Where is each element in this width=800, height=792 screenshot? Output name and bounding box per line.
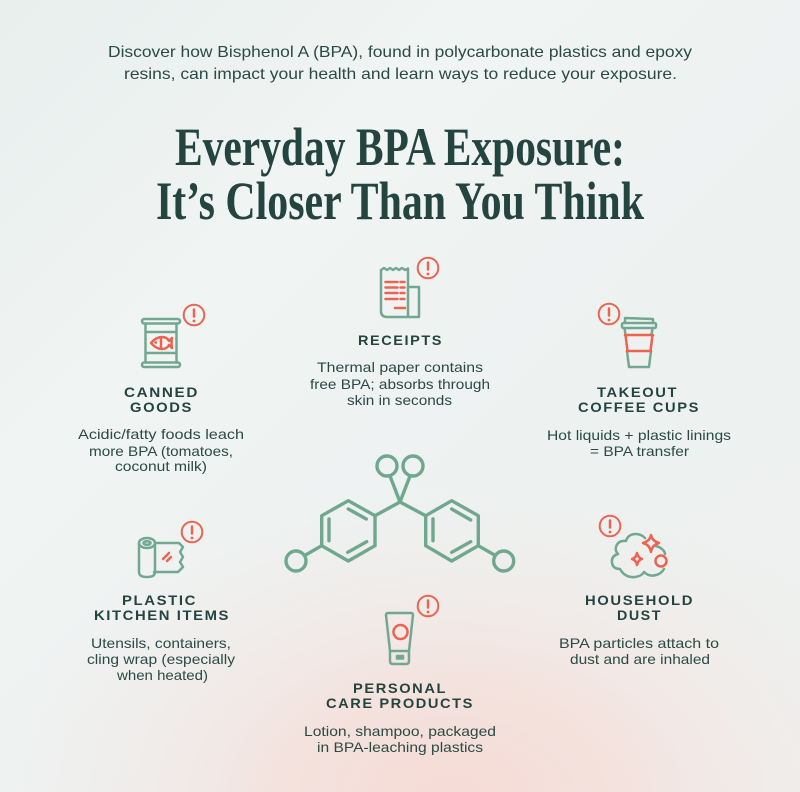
heading: plastic kitchen items: PLASTIC [122,592,197,608]
text: receipts [310,359,490,408]
text: personal care products: Lotion, shampoo, packaged [304,723,496,739]
heading: canned goods: CANNED [124,384,199,400]
heading: plastic kitchen items [94,592,230,623]
heading: plastic kitchen items: KITCHEN ITEMS [94,607,230,623]
icon: alert [600,516,620,536]
text: plastic kitchen items: cling wrap (especially [87,651,235,667]
text: household dust [559,635,719,667]
text: household dust: BPA particles attach to [559,635,719,651]
title: Everyday BPA Exposure: [175,117,625,177]
icon: tube [386,613,413,664]
text: receipts: skin in seconds [347,392,452,408]
text: canned goods: more BPA (tomatoes, [89,443,233,459]
heading: household dust: DUST [617,607,662,623]
panel: takeout coffee cups [547,304,731,459]
icon: can [142,319,180,367]
heading: takeout coffee cups: TAKEOUT [597,384,678,400]
panel: personal care products [304,596,496,755]
text: canned goods: coconut milk) [115,458,207,474]
chart: BPA molecule [286,456,514,571]
text: takeout coffee cups: = BPA transfer [590,443,689,459]
heading: personal care products: CARE PRODUCTS [326,695,474,711]
heading: canned goods [124,384,199,415]
text: takeout coffee cups [547,427,731,459]
icon: roll [139,538,183,577]
icon: alert [184,305,204,325]
icon: cup [622,318,656,367]
intro text: Discover how Bisphenol A (BPA), found in polycarbonate plastics and epoxy [108,44,692,61]
heading: receipts: RECEIPTS [358,332,443,348]
intro text: resins, can impact your health and learn ways to reduce your exposure. [124,66,677,83]
intro text [108,44,692,83]
panel: plastic kitchen items [87,522,235,683]
panel: household dust [559,516,719,667]
text: household dust: dust and are inhaled [570,651,710,667]
icon: alert [182,522,202,542]
heading: household dust [585,592,694,623]
heading: household dust: HOUSEHOLD [585,592,694,608]
icon: dust cloud [612,534,666,577]
text: plastic kitchen items: Utensils, containers, [91,635,231,651]
text: personal care products: in BPA-leaching plastics [317,739,483,755]
icon: alert [418,596,438,616]
icon: alert [418,258,438,278]
title: It’s Closer Than You Think [156,171,644,231]
heading: canned goods: GOODS [130,399,193,415]
heading: personal care products: PERSONAL [353,680,447,696]
text: canned goods [78,426,244,474]
panel: receipts [310,258,490,408]
text: personal care products [304,723,496,755]
text: receipts: Thermal paper contains [317,359,483,375]
heading: personal care products [326,680,474,711]
icon: alert [599,304,619,324]
text: receipts: free BPA; absorbs through [310,376,490,392]
panel: canned goods [78,305,244,474]
title [156,117,644,231]
heading: takeout coffee cups [578,384,700,415]
icon: receipt [381,268,419,317]
heading: takeout coffee cups: COFFEE CUPS [578,399,700,415]
text: takeout coffee cups: Hot liquids + plastic linings [547,427,731,443]
text: plastic kitchen items [87,635,235,683]
text: canned goods: Acidic/fatty foods leach [78,426,244,442]
text: plastic kitchen items: when heated) [116,667,208,683]
